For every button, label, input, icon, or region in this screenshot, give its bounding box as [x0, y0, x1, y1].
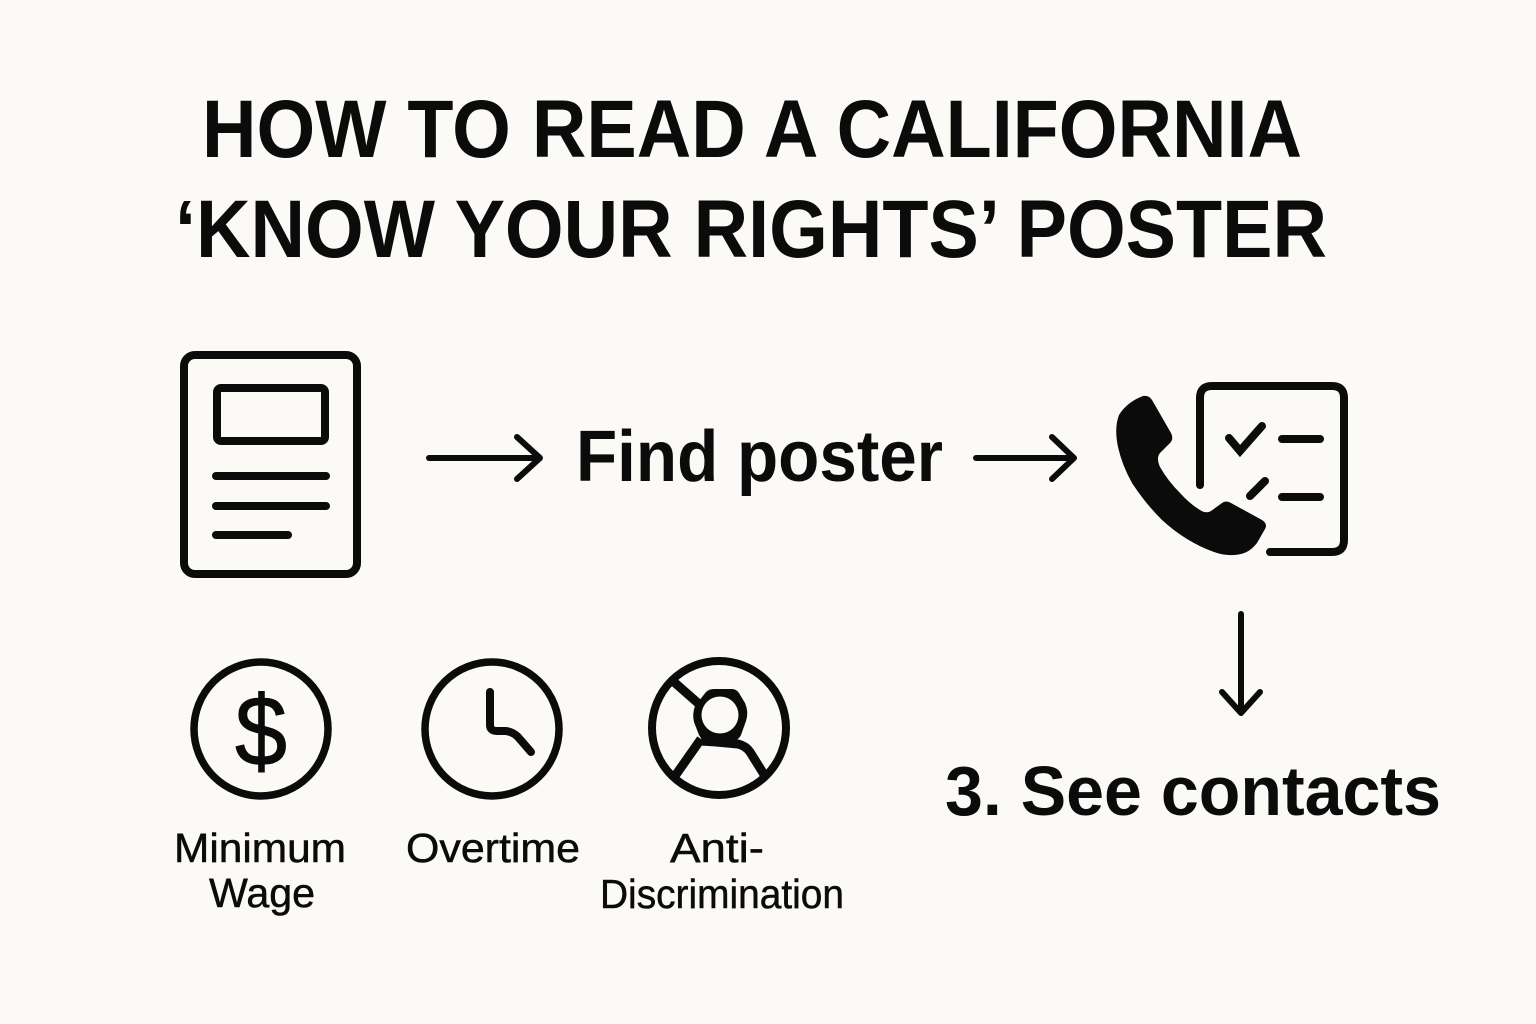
icon: phone and checklist	[1116, 386, 1344, 555]
step label: see contacts: 3. See contacts	[945, 752, 1441, 830]
icon: minimum wage dollar	[194, 662, 328, 796]
label: overtime: Overtime	[406, 825, 580, 871]
icon: anti-discrimination	[652, 661, 786, 795]
title: ‘KNOW YOUR RIGHTS’ POSTER	[175, 184, 1327, 275]
title: HOW TO READ A CALIFORNIA	[202, 84, 1302, 175]
slash	[674, 682, 699, 704]
arrow: to find poster	[429, 437, 540, 479]
checklist outline	[1200, 386, 1344, 552]
label: minimum wage: Minimum	[174, 825, 346, 871]
icon: overtime clock	[425, 662, 559, 796]
label: anti-discrimination: Anti-	[670, 825, 764, 871]
person shoulders	[675, 739, 765, 776]
label: minimum wage	[174, 825, 346, 916]
person head	[693, 689, 747, 741]
label: anti-discrimination: Discrimination	[600, 871, 844, 917]
arrow: down to see contacts	[1222, 614, 1260, 713]
checklist marks	[1229, 426, 1320, 497]
label: anti-discrimination	[600, 825, 844, 917]
icon: minimum wage dollar: $	[235, 675, 287, 786]
phone handset	[1116, 396, 1266, 555]
arrow: to contacts	[976, 437, 1074, 479]
step label: find poster: Find poster	[576, 417, 943, 497]
label: minimum wage: Wage	[209, 870, 315, 916]
title	[175, 84, 1327, 275]
icon: poster document	[184, 355, 357, 574]
